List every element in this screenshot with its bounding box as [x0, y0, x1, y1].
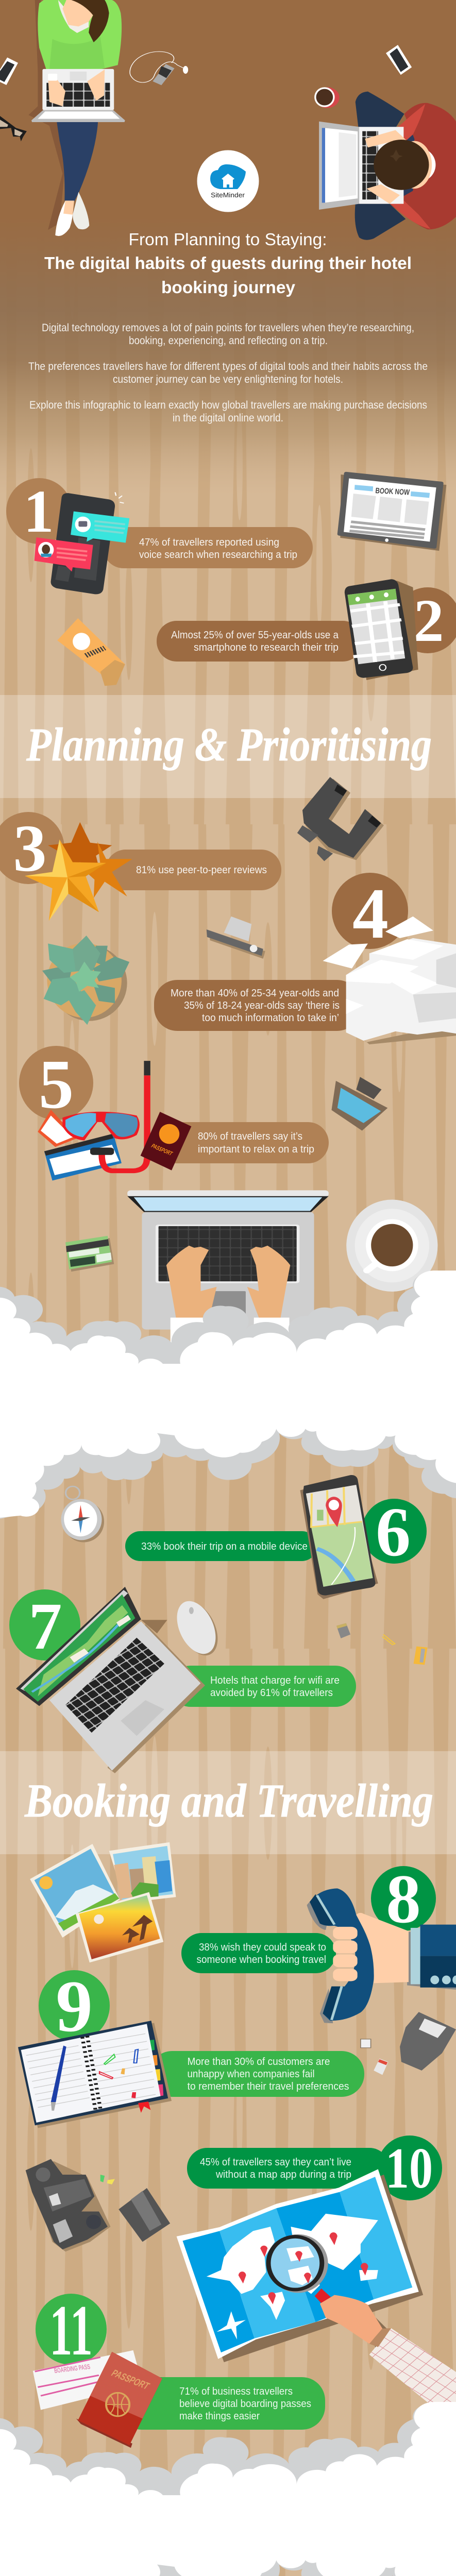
- number badge 11: [36, 2291, 107, 2370]
- number badge 10: 10: [385, 2137, 433, 2200]
- callout 8: [181, 1933, 336, 1973]
- callout 5: [155, 1122, 329, 1163]
- number badge 5: 5: [39, 1046, 74, 1123]
- icon: compass: [61, 1486, 104, 1543]
- logo badge: SiteMinder: [211, 191, 245, 199]
- icon: review stars: [25, 822, 132, 921]
- icon: map phone with pin: [300, 1475, 378, 1599]
- icon: boarding pass and passport: BOARDING PASS: [54, 2363, 91, 2375]
- icon: snorkel, tickets and passport: PASSPORT: [150, 1142, 174, 1157]
- phone on left of desk: [0, 58, 18, 85]
- icon: coffee on saucer: [346, 1200, 437, 1292]
- man with laptop illustration: [319, 92, 456, 240]
- callout 4: too much information to take in’: [202, 1012, 339, 1024]
- icon: succulent plant: [42, 936, 129, 1025]
- callout 7: [170, 1666, 356, 1707]
- cloud divider one: [0, 1270, 456, 1519]
- callout 6: 33% book their trip on a mobile device: [141, 1541, 308, 1552]
- callout 4: More than 40% of 25-34 year-olds and: [171, 988, 339, 999]
- number badge 11: 11: [49, 2291, 93, 2370]
- title: [44, 230, 412, 297]
- icon: tablet book now: [340, 473, 446, 551]
- callout 9: [149, 2051, 364, 2097]
- icon: holiday photos: [30, 1842, 176, 1962]
- number badge 4: 4: [352, 874, 389, 954]
- dark brown header fade: [0, 0, 456, 495]
- callout 6: [125, 1531, 317, 1561]
- callout 9: to remember their travel preferences: [188, 2081, 349, 2092]
- coffee cup with red rim: [314, 87, 340, 108]
- callout 5: important to relax on a trip: [198, 1144, 314, 1155]
- number badge 2: 2: [413, 587, 444, 654]
- number badge 8: 8: [386, 1861, 421, 1938]
- callout 1: voice search when researching a trip: [139, 549, 297, 561]
- callout 3: [106, 850, 281, 890]
- number badge 1: [6, 478, 72, 545]
- title: From Planning to Staying:: [129, 230, 327, 249]
- open laptop with resort map: [16, 1587, 205, 1773]
- icon: boarding pass and passport: [33, 2350, 162, 2448]
- section band: booking: [0, 1751, 456, 1854]
- number badge 9: 9: [56, 1965, 93, 2047]
- number badge 5: [19, 1046, 93, 1123]
- intro text: The preferences travellers have for different types of digital tools and their habits across the: [28, 361, 428, 372]
- intro text: [28, 322, 428, 424]
- icon: hand holding phone handset: [307, 1888, 456, 2023]
- small desk items: [336, 1623, 428, 1665]
- callout 5: 80% of travellers say it’s: [198, 1131, 302, 1142]
- icon: small camera: [207, 917, 265, 959]
- callout 2: [157, 621, 363, 662]
- number badge 1: 1: [24, 478, 54, 545]
- callout 9: More than 30% of customers are: [188, 2056, 330, 2067]
- icon: sunscreen tube: [57, 618, 125, 686]
- icon: map phone: [345, 579, 418, 680]
- arm with plaid sleeve: [369, 2328, 456, 2405]
- callout 1: 47% of travellers reported using: [139, 537, 279, 548]
- music player with earphones: [130, 52, 188, 85]
- callout 2: Almost 25% of over 55-year-olds use a: [171, 630, 339, 641]
- number badge 3: 3: [13, 811, 46, 886]
- callout 4: [154, 980, 360, 1031]
- title: booking journey: [161, 278, 296, 297]
- number badge 7: [9, 1589, 80, 1664]
- callout 7: Hotels that charge for wifi are: [210, 1675, 340, 1686]
- intro text: in the digital online world.: [173, 412, 283, 424]
- callout 1: [103, 527, 313, 568]
- phone on right of desk: [386, 45, 412, 75]
- callout 8: 38% wish they could speak to: [199, 1942, 326, 1953]
- number badge 2: [395, 587, 456, 654]
- callout 11: 71% of business travellers: [179, 2386, 293, 2397]
- icon: binoculars: [297, 777, 384, 861]
- callout 3: 81% use peer-to-peer reviews: [136, 865, 267, 876]
- intro text: customer journey can be very enlightening for hotels.: [113, 374, 343, 385]
- icon: boarding pass and passport: PASSPORT: [109, 2367, 152, 2392]
- icon: picture frame: [331, 1077, 387, 1131]
- icon: tablet book now: BOOK NOW: [375, 486, 410, 497]
- callout 9: unhappy when companies fail: [188, 2069, 314, 2080]
- icon: notebook with pen: [18, 2021, 172, 2128]
- callout 2: smartphone to research their trip: [194, 642, 339, 653]
- callout 10: 45% of travellers say they can’t live: [200, 2157, 351, 2168]
- callout 10: without a map app during a trip: [215, 2169, 351, 2180]
- callout 8: someone when booking travel: [197, 1954, 326, 1965]
- icon: camera and lens: [26, 2159, 170, 2251]
- number badge 6: [362, 1494, 427, 1571]
- icon: snorkel, tickets and passport: [38, 1061, 191, 1180]
- intro text: booking, experiencing, and reflecting on a trip.: [129, 335, 328, 347]
- intro text: Digital technology removes a lot of pain points for travellers when they’re researching,: [42, 322, 414, 334]
- number badge 7: 7: [29, 1589, 62, 1664]
- icon: camera flash: [361, 2012, 456, 2075]
- number badge 4: [332, 873, 408, 954]
- icon: computer mouse: [170, 1598, 225, 1658]
- callout 11: make things easier: [179, 2411, 260, 2422]
- logo badge: [197, 150, 259, 212]
- callout 11: [119, 2377, 325, 2430]
- icon: credit card: [65, 1236, 114, 1272]
- glasses: [0, 116, 27, 141]
- number badge 6: 6: [376, 1494, 411, 1571]
- callout 11: believe digital boarding passes: [179, 2398, 311, 2410]
- title: The digital habits of guests during their hotel: [44, 253, 412, 273]
- icon: paper stack: [323, 917, 456, 1044]
- callout 10: [187, 2148, 390, 2189]
- icon: world map with magnifier: [177, 2169, 423, 2362]
- number badge 8: [371, 1861, 436, 1938]
- number badge 3: [0, 811, 64, 886]
- section band: planning: [0, 695, 456, 798]
- woman with laptop illustration: [28, 0, 125, 236]
- laptop with typing hands: [127, 1190, 329, 1361]
- icon: chatbot phone: [35, 492, 129, 594]
- callout 4: 35% of 18-24 year-olds say ‘there is: [184, 1000, 340, 1011]
- number badge 9: [39, 1965, 110, 2047]
- cloud divider two: [0, 2402, 456, 2576]
- callout 7: avoided by 61% of travellers: [210, 1687, 333, 1699]
